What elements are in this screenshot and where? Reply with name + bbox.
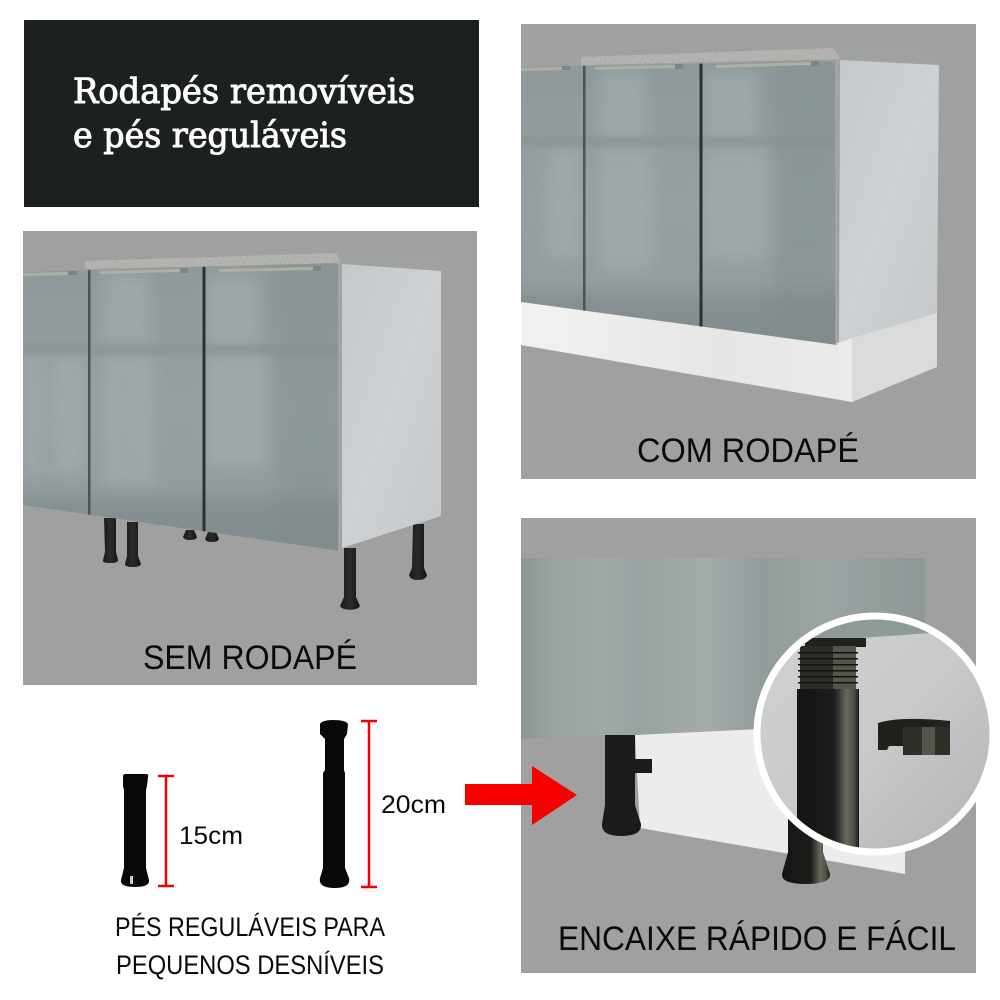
glass doors xyxy=(521,60,841,350)
glass door strip xyxy=(521,558,925,739)
cabinet side xyxy=(342,264,441,548)
caption: com rodapé: COM RODAPÉ xyxy=(637,432,859,470)
plinth front xyxy=(521,301,852,402)
magnifier circle xyxy=(750,600,1000,854)
caption: encaixe: ENCAIXE RÁPIDO E FÁCIL xyxy=(558,920,956,958)
title panel xyxy=(24,20,479,207)
leg body xyxy=(797,689,859,854)
plinth side xyxy=(852,313,937,402)
tall 20cm foot xyxy=(320,720,349,888)
reflected door in magnifier xyxy=(812,620,929,638)
red dimension 20cm xyxy=(361,721,377,887)
door handles xyxy=(521,61,819,71)
panel: sem rodapé xyxy=(23,231,477,685)
door handles xyxy=(23,266,321,276)
panel: encaixe rápido e fácil xyxy=(521,518,1000,973)
panel: com rodapé xyxy=(521,24,976,479)
title text: e pés reguláveis xyxy=(73,116,347,156)
short 15cm foot xyxy=(121,774,149,887)
left leg and clip xyxy=(602,735,652,836)
right leg xyxy=(782,815,830,884)
countertop xyxy=(581,48,939,65)
caption: sem rodapé: SEM RODAPÉ xyxy=(143,639,357,677)
feet caption: PÉS REGULÁVEIS PARA xyxy=(115,912,385,942)
red dimension 15cm xyxy=(158,776,174,886)
red arrow xyxy=(465,766,577,825)
title text: Rodapés removíveis xyxy=(73,72,415,112)
cabinet side xyxy=(839,60,939,343)
white plinth xyxy=(635,722,905,874)
clip xyxy=(878,719,950,755)
countertop xyxy=(85,253,442,269)
glass doors xyxy=(23,260,345,555)
threaded leg top xyxy=(798,638,866,690)
cabinet legs xyxy=(103,518,427,610)
feet caption: PEQUENOS DESNÍVEIS xyxy=(116,950,384,980)
label 15cm: 15cm xyxy=(179,822,243,850)
label 20cm: 20cm xyxy=(381,791,446,819)
